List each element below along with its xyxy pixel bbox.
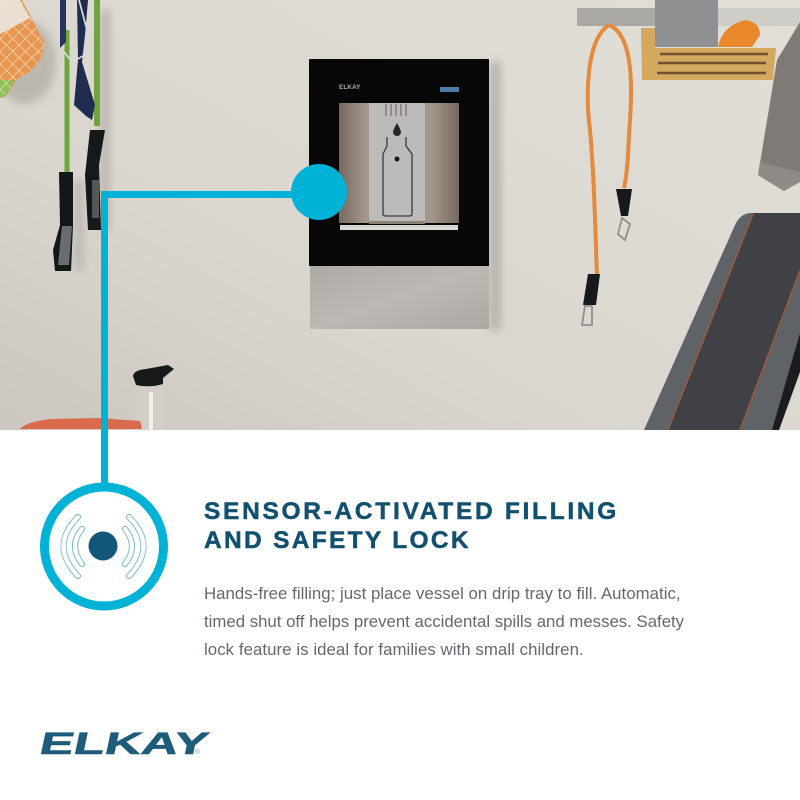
heading: SENSOR-ACTIVATED FILLING — [204, 498, 619, 525]
water bottle — [133, 365, 174, 430]
wall background — [0, 0, 800, 430]
heading — [204, 498, 619, 554]
sensor icon — [44, 487, 164, 606]
callout connector — [104, 194, 319, 490]
description text — [204, 584, 684, 659]
station display — [440, 87, 459, 92]
exercise bench — [644, 213, 800, 430]
logo wordmark: ELKAY — [37, 726, 212, 761]
Elkay logo — [37, 726, 212, 761]
icon center dot — [88, 532, 118, 560]
callout dot — [291, 164, 347, 220]
icon ring — [44, 487, 164, 606]
description text: Hands-free filling; just place vessel on drip tray to fill. Automatic, — [204, 584, 681, 603]
white lower panel — [0, 430, 800, 800]
logo registered mark: ® — [195, 748, 201, 756]
heading: AND SAFETY LOCK — [204, 527, 471, 554]
resistance bands, green and navy — [53, 0, 110, 271]
wall rail and caddy — [577, 0, 800, 80]
station stainless kick plate — [310, 266, 489, 329]
icon sensor waves — [64, 517, 144, 576]
station window — [339, 103, 459, 223]
station brand label: ELKAY — [339, 84, 361, 91]
description text: lock feature is ideal for families with small children. — [204, 640, 584, 659]
red towel — [20, 418, 142, 429]
bottle filling station — [309, 59, 501, 330]
description text: timed shut off helps prevent accidental spills and messes. Safety — [204, 612, 684, 631]
orange resistance band — [582, 25, 632, 325]
bottle outline and drop icon — [383, 137, 412, 216]
net bag of fruit — [0, 0, 56, 104]
gray towel — [758, 22, 800, 191]
